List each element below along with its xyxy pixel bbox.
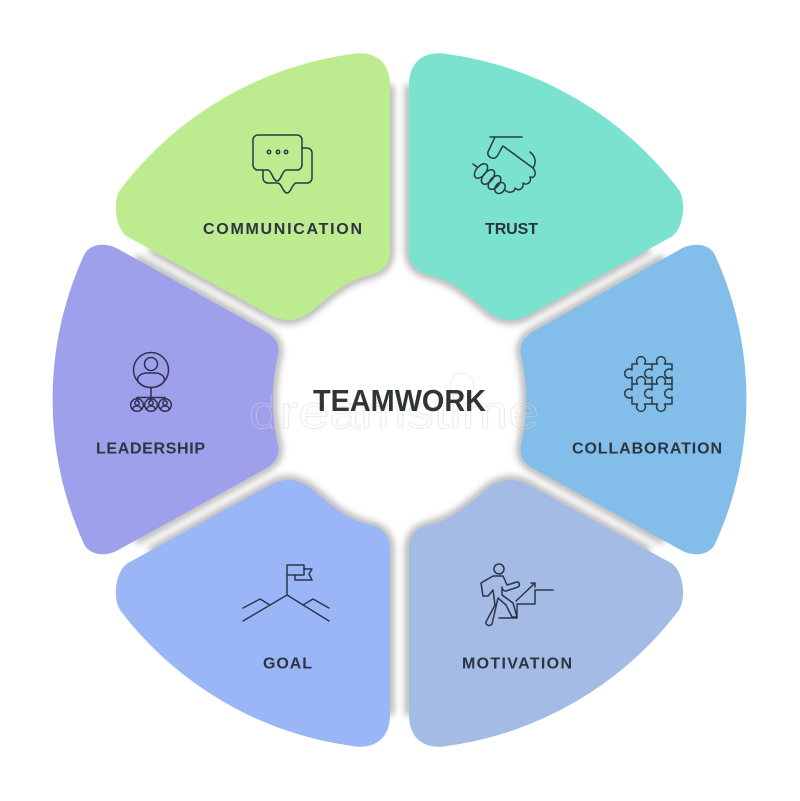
panel: motivation: [409, 480, 683, 747]
communication shape: [116, 53, 390, 320]
label: collaboration: COLLABORATION: [572, 440, 722, 458]
label: goal: GOAL: [263, 656, 312, 672]
icon: handshake: [472, 137, 535, 196]
leadership shape: [53, 245, 278, 554]
label: leadership: LEADERSHIP: [96, 440, 205, 458]
icon: puzzle pieces: [625, 357, 672, 411]
collaboration shape: [521, 245, 746, 554]
panel: collaboration: [521, 245, 746, 554]
goal shape: [116, 480, 390, 747]
icon: speech bubbles: [253, 135, 312, 193]
watermark: dreamstime: [249, 386, 539, 438]
icon: flag on mountain: [243, 565, 329, 621]
title: TEAMWORK: [313, 383, 487, 418]
panel: communication: [116, 53, 390, 320]
watermark: [249, 373, 539, 438]
motivation shape: [409, 480, 683, 747]
panel: goal: [116, 480, 390, 747]
panel: trust: [409, 53, 683, 320]
trust shape: [409, 53, 683, 320]
panel: leadership: [53, 245, 278, 554]
label: trust: TRUST: [485, 221, 538, 238]
icon: leader and team: [131, 352, 171, 411]
label: motivation: MOTIVATION: [462, 656, 572, 672]
label: communication: COMMUNICATION: [203, 221, 362, 238]
icon: person climbing stairs: [481, 564, 553, 625]
